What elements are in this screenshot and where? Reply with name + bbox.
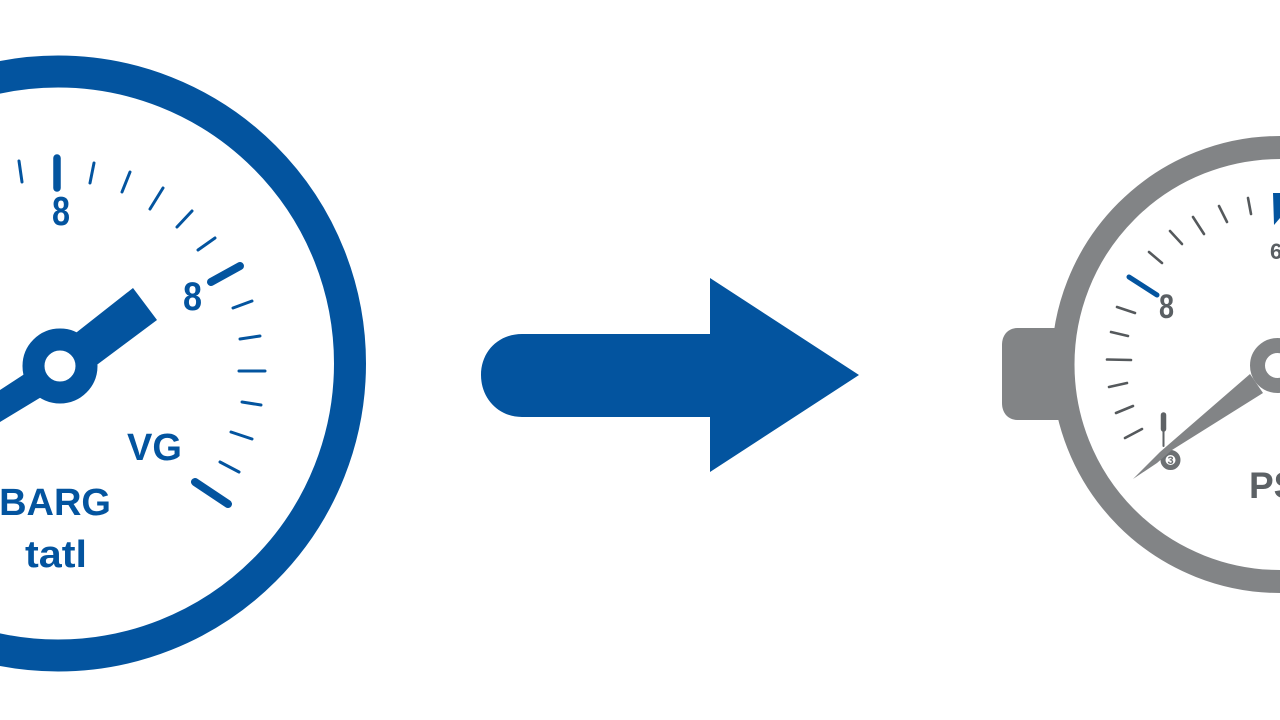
side lug [1002,328,1066,420]
blue tick [1129,277,1157,295]
needle hub [1258,346,1280,386]
icon: grey PSI gauge [1002,148,1280,582]
scale number: 8 [183,275,202,319]
icon: blue BARG gauge [0,72,350,656]
blue top tick [1273,193,1280,225]
gauge ring [0,72,350,656]
scale number: 8 [52,188,70,234]
scale number ring [1163,452,1178,468]
scale number: 3 [1168,455,1174,467]
major ticks [57,158,240,504]
dark tick [1161,415,1166,446]
BARG label: BARG [0,482,111,524]
VG label: VG [127,427,182,469]
tick marks [1107,198,1251,438]
needle [0,288,157,422]
scale number: 8 [1159,288,1174,326]
arrow [481,278,859,472]
gauge ring [1063,148,1280,582]
tatl label: tatl [25,534,87,576]
needle [1133,374,1263,479]
tick marks [19,161,265,472]
needle hub [34,340,86,392]
